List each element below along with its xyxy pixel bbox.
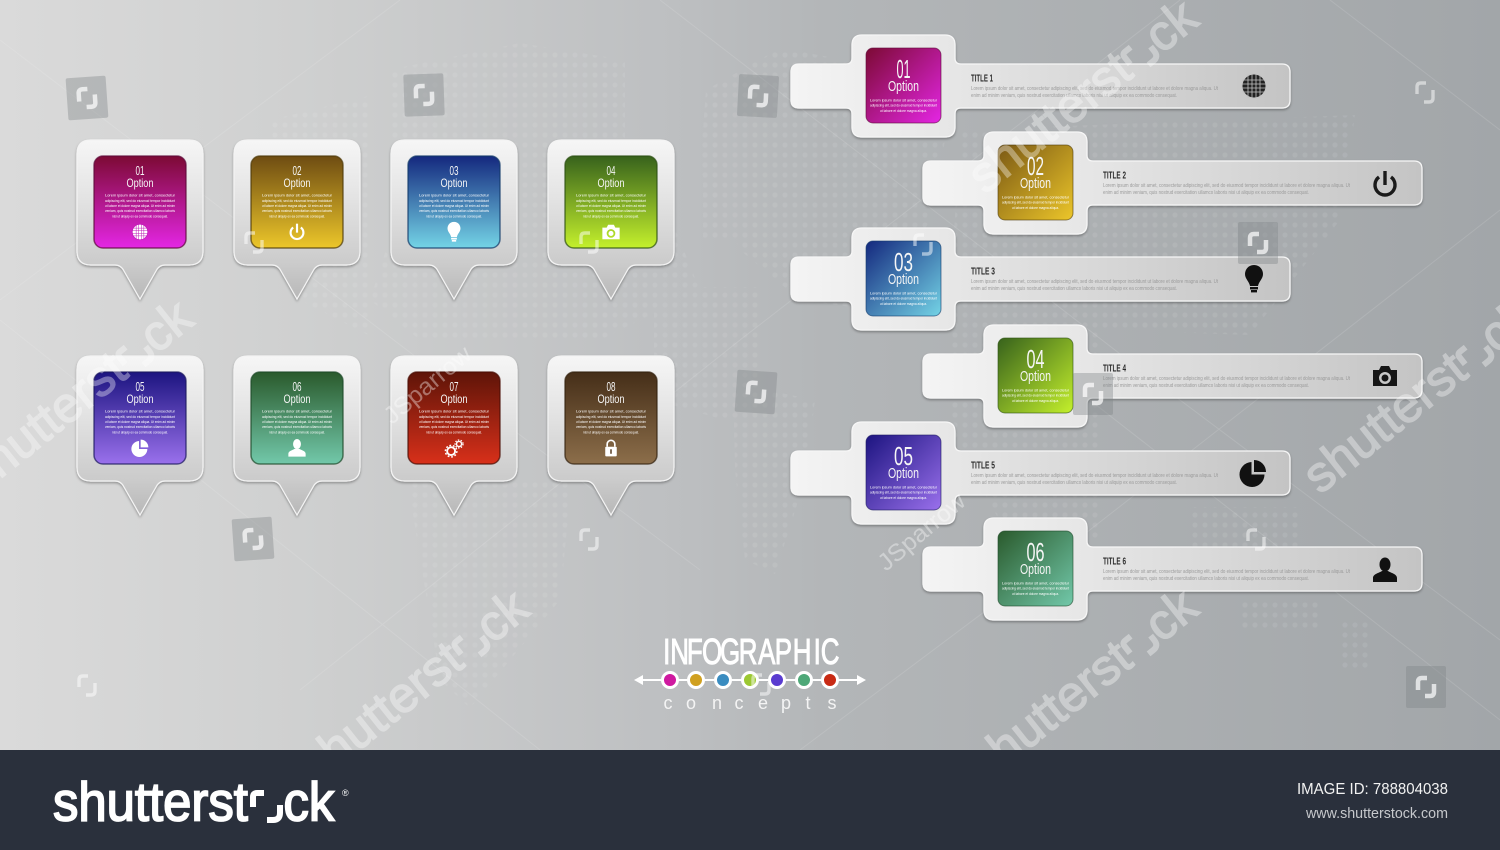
pin 06 <box>234 356 360 515</box>
watermarks: shutterstock <box>957 577 1208 793</box>
bar 03: 03 <box>894 247 913 277</box>
bar 06: Option <box>1020 561 1051 578</box>
bar 03: Lorem ipsum dolor sit amet, consectetur adipiscing elit, sed do eiusmod tempor incididunt ut labore et dolore magna aliqua. Ut <box>971 279 1218 285</box>
bar 05: Option <box>888 465 919 482</box>
pin 06: Option <box>284 392 310 406</box>
pin 05: 05 <box>136 380 145 394</box>
pin 04: Option <box>598 176 624 190</box>
bar 01: Option <box>888 78 919 95</box>
bar 02: TITLE 2 <box>1103 170 1126 182</box>
pin 08: ut labore et dolore magna aliqua. Ut enim ad minim <box>576 420 646 424</box>
bar 05: 05 <box>894 441 913 471</box>
pin 06: Lorem ipsum dolor sit amet, consectetur <box>262 410 333 414</box>
pin 04: veniam, quis nostrud exercitation ullamco laboris <box>576 209 646 213</box>
bar 06: Lorem ipsum dolor sit amet, consectetur adipiscing elit, sed do eiusmod tempor incididunt ut labore et dolore magna aliqua. Ut <box>1103 569 1350 575</box>
bar 06: 06 <box>1026 537 1044 567</box>
bar 03 <box>791 228 1290 330</box>
bar 05: ut labore et dolore magna aliqua. <box>880 496 927 500</box>
pin 01: nisi ut aliquip ex ea commodo consequat. <box>112 214 168 218</box>
pin 08: 08 <box>606 380 616 394</box>
pin 08 <box>548 356 674 515</box>
bar 05: adipiscing elit, sed do eiusmod tempor incididunt <box>870 490 938 494</box>
pin 01: veniam, quis nostrud exercitation ullamco laboris <box>105 209 175 213</box>
pin 02: adipiscing elit, sed do eiusmod tempor incididunt <box>262 199 333 203</box>
bar 02: Option <box>1020 175 1051 192</box>
bar 01: 01 <box>896 54 910 84</box>
pin 07 <box>391 356 517 515</box>
bar 03: TITLE 3 <box>971 266 995 278</box>
icon: power <box>1375 171 1395 195</box>
bar 03: Lorem ipsum dolor sit amet, consectetur <box>870 292 938 296</box>
pin 01: Lorem ipsum dolor sit amet, consectetur <box>105 194 176 198</box>
pin 08: adipiscing elit, sed do eiusmod tempor incididunt <box>576 415 647 419</box>
pin 04 <box>548 140 674 299</box>
pin 07: veniam, quis nostrud exercitation ullamco laboris <box>419 425 489 429</box>
footer bar <box>0 750 1500 850</box>
image id: IMAGE ID: 788804038 <box>1297 781 1448 798</box>
bar 04: 04 <box>1026 344 1044 374</box>
pin 08: Lorem ipsum dolor sit amet, consectetur <box>576 410 647 414</box>
bar 03: Option <box>888 271 919 288</box>
icon: camera <box>602 225 620 239</box>
bar 03: adipiscing elit, sed do eiusmod tempor incididunt <box>870 296 938 300</box>
icon: gears <box>445 440 463 457</box>
bar 01: enim ad minim veniam, quis nostrud exercitation ullamco laboris nisi ut aliquip ex ea commodo consequat. <box>971 93 1177 99</box>
pin 07: adipiscing elit, sed do eiusmod tempor incididunt <box>419 415 490 419</box>
icon: user <box>1373 558 1397 582</box>
pin 07: 07 <box>450 380 459 394</box>
bar 05 <box>791 422 1290 524</box>
pin 02: Lorem ipsum dolor sit amet, consectetur <box>262 194 333 198</box>
bar 06: adipiscing elit, sed do eiusmod tempor incididunt <box>1002 586 1070 590</box>
pin 06: adipiscing elit, sed do eiusmod tempor incididunt <box>262 415 333 419</box>
icon: pie chart <box>131 440 148 457</box>
bar 01: ut labore et dolore magna aliqua. <box>880 109 927 113</box>
bar 02: adipiscing elit, sed do eiusmod tempor incididunt <box>1002 200 1070 204</box>
bar 02 <box>923 132 1422 234</box>
icon: globe <box>132 224 148 240</box>
bar 02: Lorem ipsum dolor sit amet, consectetur adipiscing elit, sed do eiusmod tempor incididunt ut labore et dolore magna aliqua. Ut <box>1103 183 1350 189</box>
pin 05: Option <box>126 392 154 406</box>
bar 03: ut labore et dolore magna aliqua. <box>880 302 927 306</box>
pin 02: nisi ut aliquip ex ea commodo consequat. <box>269 214 325 218</box>
pin 03: adipiscing elit, sed do eiusmod tempor incididunt <box>419 199 490 203</box>
bar 06: ut labore et dolore magna aliqua. <box>1012 592 1059 596</box>
pin 02: 02 <box>292 164 302 178</box>
pin 01: 01 <box>136 164 145 178</box>
watermarks: JSparrow <box>379 340 478 430</box>
pin 01: adipiscing elit, sed do eiusmod tempor incididunt <box>105 199 176 203</box>
timeline arrow <box>642 679 858 681</box>
icon: power <box>291 224 303 239</box>
pin 04: 04 <box>606 164 616 178</box>
pin 07: Option <box>440 392 468 406</box>
pin 04: ut labore et dolore magna aliqua. Ut enim ad minim <box>576 204 646 208</box>
watermarks: shutterstock <box>288 578 539 794</box>
bar 03: enim ad minim veniam, quis nostrud exercitation ullamco laboris nisi ut aliquip ex ea commodo consequat. <box>971 286 1177 292</box>
bar 02: enim ad minim veniam, quis nostrud exercitation ullamco laboris nisi ut aliquip ex ea commodo consequat. <box>1103 190 1309 196</box>
footer logo: ® <box>342 788 349 798</box>
pin 02: Option <box>284 176 310 190</box>
pin 04: adipiscing elit, sed do eiusmod tempor incididunt <box>576 199 647 203</box>
pin 01 <box>77 140 203 299</box>
pin 08: veniam, quis nostrud exercitation ullamco laboris <box>576 425 646 429</box>
bar 01: adipiscing elit, sed do eiusmod tempor incididunt <box>870 104 938 108</box>
pin 06: nisi ut aliquip ex ea commodo consequat. <box>269 430 325 434</box>
pin 02: veniam, quis nostrud exercitation ullamco laboris <box>262 209 332 213</box>
pin 03 <box>391 140 517 299</box>
pin 03: Option <box>440 176 468 190</box>
bar 06: enim ad minim veniam, quis nostrud exercitation ullamco laboris nisi ut aliquip ex ea commodo consequat. <box>1103 576 1309 582</box>
pin 08: nisi ut aliquip ex ea commodo consequat. <box>583 430 639 434</box>
pin 03: veniam, quis nostrud exercitation ullamco laboris <box>419 209 489 213</box>
website: www.shutterstock.com <box>1305 806 1448 822</box>
bar 05: Lorem ipsum dolor sit amet, consectetur <box>870 486 938 490</box>
pin 05: ut labore et dolore magna aliqua. Ut enim ad minim <box>105 420 175 424</box>
bar 04: adipiscing elit, sed do eiusmod tempor incididunt <box>1002 394 1070 398</box>
pin 04: Lorem ipsum dolor sit amet, consectetur <box>576 194 647 198</box>
pin 05: veniam, quis nostrud exercitation ullamco laboris <box>105 425 175 429</box>
bar 05: Lorem ipsum dolor sit amet, consectetur adipiscing elit, sed do eiusmod tempor incididunt ut labore et dolore magna aliqua. Ut <box>971 473 1218 479</box>
timeline dots <box>662 672 838 688</box>
bar 01: Lorem ipsum dolor sit amet, consectetur <box>870 98 938 102</box>
pin 05: Lorem ipsum dolor sit amet, consectetur <box>105 410 176 414</box>
icon: pie chart <box>1240 460 1266 487</box>
pin 05: adipiscing elit, sed do eiusmod tempor incididunt <box>105 415 176 419</box>
bar 04 <box>923 325 1422 427</box>
pin 06: veniam, quis nostrud exercitation ullamco laboris <box>262 425 332 429</box>
pin 06: 06 <box>292 380 302 394</box>
pin 02: ut labore et dolore magna aliqua. Ut enim ad minim <box>262 204 332 208</box>
bar 04: enim ad minim veniam, quis nostrud exercitation ullamco laboris nisi ut aliquip ex ea commodo consequat. <box>1103 383 1309 389</box>
pin 02 <box>234 140 360 299</box>
watermarks: JSparrow <box>873 487 972 577</box>
icon: user <box>288 439 306 457</box>
icon: light bulb <box>448 222 460 242</box>
icon: camera <box>1373 366 1397 386</box>
pin 07: Lorem ipsum dolor sit amet, consectetur <box>419 410 490 414</box>
pin 03: Lorem ipsum dolor sit amet, consectetur <box>419 194 490 198</box>
bar 06: TITLE 6 <box>1103 556 1126 568</box>
pin 08: Option <box>598 392 624 406</box>
pin 07: ut labore et dolore magna aliqua. Ut enim ad minim <box>419 420 489 424</box>
bar 01 <box>791 35 1290 137</box>
bar 01: TITLE 1 <box>971 74 993 84</box>
infographic concepts logo: INFOGRAPHIC <box>663 632 840 672</box>
bar 04: TITLE 4 <box>1103 364 1126 374</box>
bar 02: 02 <box>1027 151 1044 181</box>
icon: light bulb <box>1245 265 1263 292</box>
pin 06: ut labore et dolore magna aliqua. Ut enim ad minim <box>262 420 332 424</box>
infographic concepts logo <box>634 632 866 713</box>
infographic concepts logo: concepts <box>664 693 836 713</box>
pin 05 <box>77 356 203 515</box>
bar 01: Lorem ipsum dolor sit amet, consectetur adipiscing elit, sed do eiusmod tempor incididunt ut labore et dolore magna aliqua. Ut <box>971 86 1218 92</box>
bar 04: Lorem ipsum dolor sit amet, consectetur <box>1002 388 1070 392</box>
pin 04: nisi ut aliquip ex ea commodo consequat. <box>583 214 639 218</box>
pin 03: ut labore et dolore magna aliqua. Ut enim ad minim <box>419 204 489 208</box>
pin 03: 03 <box>450 164 459 178</box>
bar 04: Option <box>1020 368 1051 385</box>
pin 05: nisi ut aliquip ex ea commodo consequat. <box>112 430 168 434</box>
bar 04: ut labore et dolore magna aliqua. <box>1012 399 1059 403</box>
bar 06 <box>923 518 1422 620</box>
bar 04: Lorem ipsum dolor sit amet, consectetur adipiscing elit, sed do eiusmod tempor incididunt ut labore et dolore magna aliqua. Ut <box>1103 376 1350 382</box>
pin 01: ut labore et dolore magna aliqua. Ut enim ad minim <box>105 204 175 208</box>
bar 05: enim ad minim veniam, quis nostrud exercitation ullamco laboris nisi ut aliquip ex ea commodo consequat. <box>971 480 1177 486</box>
pin 07: nisi ut aliquip ex ea commodo consequat. <box>426 430 482 434</box>
icon: lock <box>605 440 617 456</box>
bar 02: ut labore et dolore magna aliqua. <box>1012 206 1059 210</box>
bar 05: TITLE 5 <box>971 460 995 472</box>
pin 03: nisi ut aliquip ex ea commodo consequat. <box>426 214 482 218</box>
bar 06: Lorem ipsum dolor sit amet, consectetur <box>1002 582 1070 586</box>
pin 01: Option <box>126 176 154 190</box>
footer logo: shutterstock <box>53 772 335 833</box>
icon: globe <box>1242 74 1266 98</box>
bar 02: Lorem ipsum dolor sit amet, consectetur <box>1002 196 1070 200</box>
